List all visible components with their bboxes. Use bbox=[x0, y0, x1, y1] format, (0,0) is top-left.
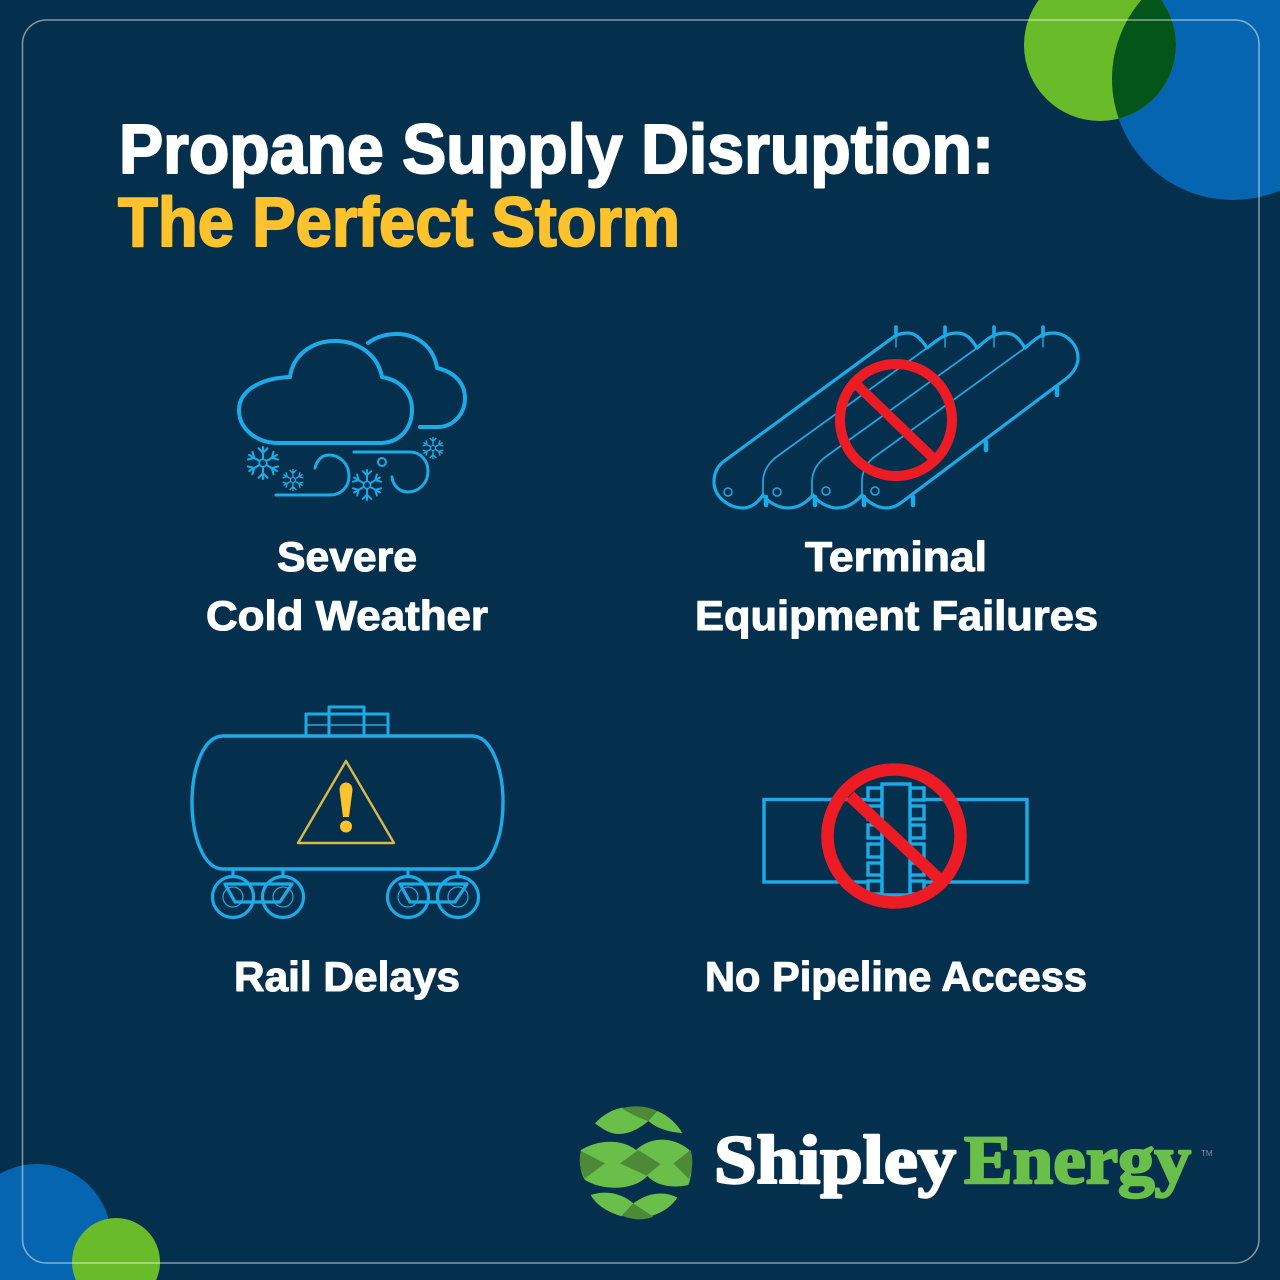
panel: severe cold weather bbox=[206, 334, 488, 639]
tank legs bbox=[766, 327, 1057, 505]
panel: rail delays bbox=[192, 707, 503, 1000]
tank valves bbox=[724, 487, 879, 496]
label: severe cold weather: Severe bbox=[277, 533, 417, 580]
flange with bolts bbox=[868, 784, 924, 895]
tank body bbox=[192, 736, 503, 869]
decorative circles: bottom left bbox=[0, 1164, 160, 1280]
label: severe cold weather bbox=[206, 533, 488, 639]
label: terminal equipment failures: Terminal bbox=[805, 533, 987, 580]
prohibition sign bbox=[828, 770, 960, 902]
logo: Shipley Energy bbox=[580, 1106, 1213, 1219]
icon: rail tank car with warning bbox=[192, 707, 503, 918]
tank dome bbox=[306, 707, 388, 736]
wheels bbox=[212, 869, 478, 918]
pipe bbox=[764, 800, 1027, 882]
panel: no pipeline access bbox=[705, 770, 1087, 1000]
label: rail delays: Rail Delays bbox=[234, 953, 460, 1000]
title: Propane Supply Disruption: bbox=[119, 110, 994, 188]
title bbox=[118, 110, 994, 261]
icon: clouds, wind and snow bbox=[239, 334, 465, 500]
label: no pipeline access: No Pipeline Access bbox=[705, 953, 1087, 1000]
icon: pipeline flange with prohibition sign bbox=[764, 770, 1027, 902]
logo mark bbox=[580, 1106, 692, 1219]
title: The Perfect Storm bbox=[118, 183, 680, 261]
label: severe cold weather: Cold Weather bbox=[206, 592, 488, 639]
logo wordmark: Shipley bbox=[714, 1122, 956, 1198]
panel: terminal equipment failures bbox=[695, 327, 1098, 639]
logo wordmark: Energy bbox=[964, 1122, 1191, 1198]
label: terminal equipment failures bbox=[695, 533, 1098, 639]
decorative circles: top right bbox=[1024, 0, 1280, 200]
logo wordmark bbox=[714, 1122, 1213, 1198]
label: terminal equipment failures: Equipment Failures bbox=[695, 592, 1098, 639]
logo wordmark: TM bbox=[1201, 1149, 1213, 1158]
icon: terminal tanks with prohibition sign bbox=[714, 327, 1078, 508]
tank outlines bbox=[714, 333, 1078, 508]
prohibition sign bbox=[840, 364, 952, 476]
warning triangle bbox=[298, 761, 394, 843]
